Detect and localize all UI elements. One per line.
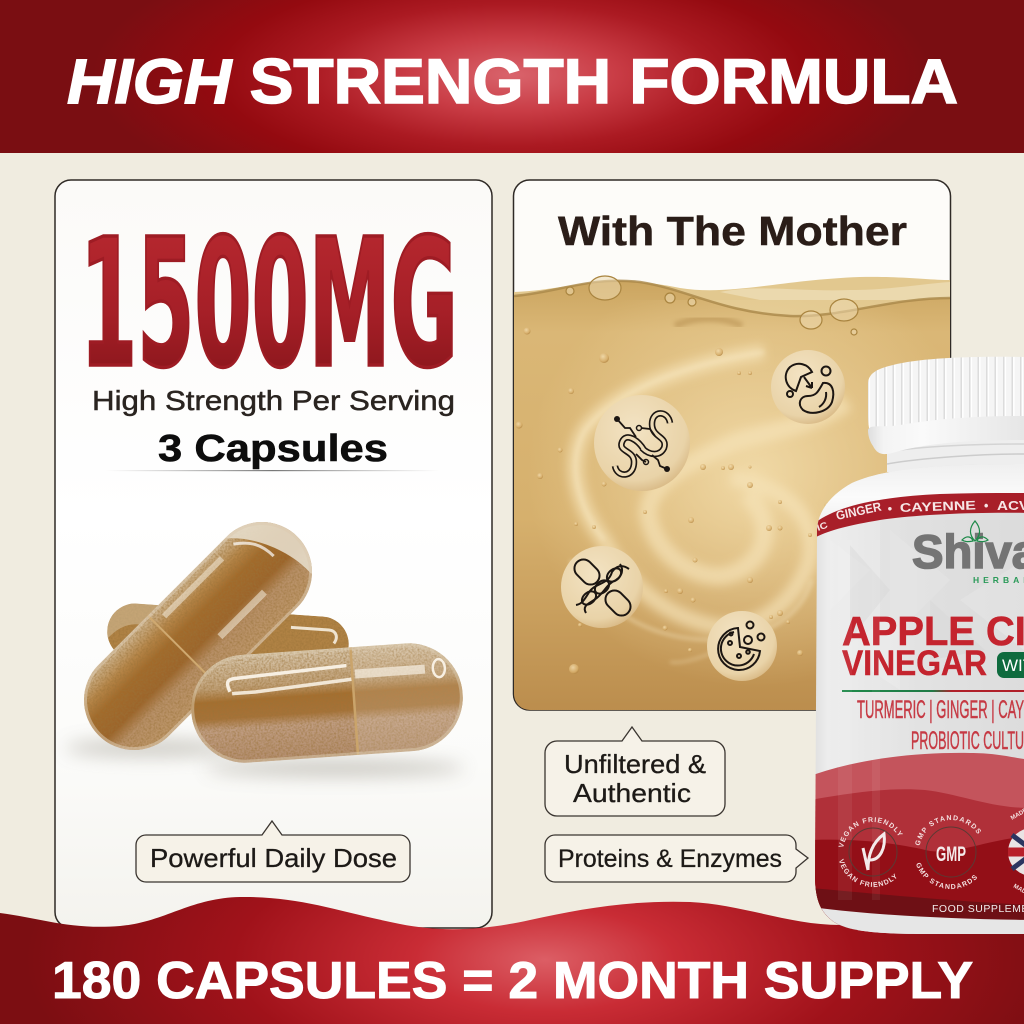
panel: 1500mg dose: 1500MG [80, 201, 458, 407]
bottle cap [868, 357, 1024, 472]
bubbles [516, 328, 833, 674]
label band with ingredients: • [984, 499, 988, 513]
badge: vegan friendly: VEGAN FRIENDLY [838, 817, 903, 847]
badge: vegan friendly [838, 817, 903, 888]
badge: gmp standards [915, 815, 981, 890]
bottle body [815, 472, 1024, 934]
front capsule [188, 640, 466, 766]
back capsule [107, 604, 349, 654]
panel: 1500mg dose [55, 180, 492, 928]
footer banner [0, 897, 1024, 1024]
heading: high strength formula: HIGH STRENGTH FORMULA [67, 47, 958, 117]
label band with ingredients [815, 493, 1024, 537]
callout: powerful daily dose: Powerful Daily Dose [150, 843, 397, 873]
label band with ingredients: IC [815, 520, 830, 533]
product name: VINEGAR [842, 644, 987, 683]
badge: gmp standards: GMP [936, 843, 966, 866]
icon disc: bacteria strands [594, 395, 690, 491]
swirl [576, 352, 847, 627]
product bottle [815, 356, 1024, 934]
label band with ingredients: ACV [997, 499, 1024, 513]
badge: vegan friendly: VEGAN FRIENDLY [839, 858, 896, 888]
panel heading: With The Mother [558, 208, 907, 254]
callout: unfiltered and authentic: Authentic [573, 778, 691, 808]
label waves [810, 753, 1024, 940]
badge: gmp standards: GMP STANDARDS [915, 815, 981, 846]
capsules photo [63, 501, 466, 776]
dose subtitle: High Strength Per Serving [92, 385, 455, 416]
label band with ingredients: CAYENNE [900, 498, 976, 515]
label band with ingredients: GINGER [835, 500, 883, 523]
header banner [0, 0, 1024, 153]
badge: gmp standards: GMP STANDARDS [916, 862, 977, 890]
glass reflections [838, 616, 880, 900]
callout: unfiltered and authentic: Unfiltered & [564, 749, 706, 779]
panel: with the mother [514, 180, 950, 882]
badge: union flag [1008, 808, 1024, 898]
ingredients list [857, 700, 1024, 750]
tilted capsule [84, 522, 312, 750]
surface bubbles [566, 276, 858, 335]
label band with ingredients: • [887, 502, 893, 516]
product name [842, 608, 1024, 692]
icon disc: dna and cells [561, 546, 643, 628]
icon disc: petri dish [707, 611, 777, 681]
callout: proteins and enzymes [545, 835, 808, 882]
capsule count: 3 Capsules [158, 428, 388, 470]
footer text: 180 CAPSULES = 2 MONTH SUPPLY [52, 952, 973, 1010]
icon disc: enzyme [771, 350, 845, 424]
callout: proteins and enzymes: Proteins & Enzymes [558, 845, 782, 873]
liquid illustration [514, 276, 950, 712]
callout: powerful daily dose [136, 821, 410, 882]
callout: unfiltered and authentic [545, 727, 725, 816]
